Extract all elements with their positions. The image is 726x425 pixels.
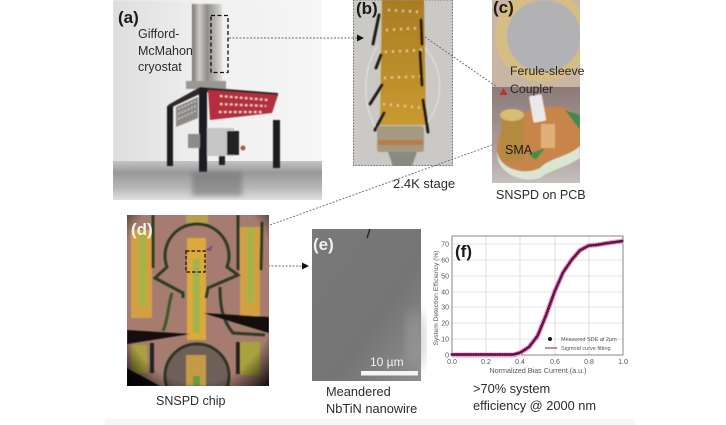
y axis tick labels: 20 [441,320,449,328]
marker: red triangle [500,88,508,95]
arrow: a to b [357,34,364,42]
x axis title: Normalized Bias Current (a.u.) [489,366,587,375]
measured data points [452,241,623,354]
scale bar [361,371,418,376]
label: SNSPD on PCB: SNSPD on PCB [496,188,586,202]
label: Gifford-McMahon cryostat: McMahon [138,44,193,58]
label: a: (a) [118,8,139,27]
label: Meandered NbTiN nanowire: Meandered [326,384,391,399]
label: 10 µm: 10 µm [370,355,404,369]
y axis title: System Detection Efficiency (%) [433,250,440,346]
x axis tick labels: 1.0 [618,359,628,366]
arrow: d to e [302,262,309,270]
label: system efficiency: >70% system [473,381,550,396]
legend: Sigmoid curve fitting [561,346,611,352]
x axis tick labels [447,359,628,366]
panel d: SNSPD chip photo [127,215,269,386]
label: SMA: SMA [505,143,533,157]
label: system efficiency: efficiency @ 2000 nm [473,398,596,413]
x axis tick labels: 0.0 [447,359,457,366]
panel a: cryostat photo [113,0,322,200]
sigmoid fit line [452,241,623,355]
legend: Measured SDE at 2µm [561,337,617,343]
connector lines [205,37,497,266]
y axis tick labels: 60 [441,258,449,264]
label: Gifford-McMahon cryostat: Gifford- [138,27,179,41]
y axis tick labels: 40 [441,290,449,296]
y axis tick labels: 10 [441,336,449,344]
y axis tick labels: 30 [441,304,449,312]
marker: purple triangle [205,245,213,251]
y axis tick labels: 0 [445,352,449,360]
x axis tick labels: 0.4 [515,359,525,366]
dashed box on chip [186,251,205,272]
y axis tick labels [441,242,449,360]
label: d: (d) [131,220,153,239]
y axis tick labels: 50 [441,274,449,280]
chart f: system detection efficiency [433,236,628,375]
x axis tick labels: 0.6 [550,359,560,366]
label: f: (f) [455,242,472,261]
panel e: SEM image [312,229,425,381]
x axis tick labels: 0.8 [584,359,594,366]
label: Ferule-sleeve Coupler: Ferule-sleeve [510,64,585,78]
label: Meandered NbTiN nanowire: NbTiN nanowire [326,401,417,416]
label: Gifford-McMahon cryostat: cryostat [138,60,182,74]
label: e: (e) [313,235,334,254]
label: SNSPD chip: SNSPD chip [156,394,226,408]
label: Ferule-sleeve Coupler: Coupler [510,82,553,96]
panel c: coin and PCB photo [492,0,589,183]
label: 2.4K stage: 2.4K stage [393,176,455,191]
x axis tick labels: 0.2 [481,359,491,366]
legend [545,337,617,352]
y axis tick labels: 70 [441,242,449,248]
panel b: 2.4K stage photo [353,0,453,166]
dashed box on cryostat [211,16,228,72]
